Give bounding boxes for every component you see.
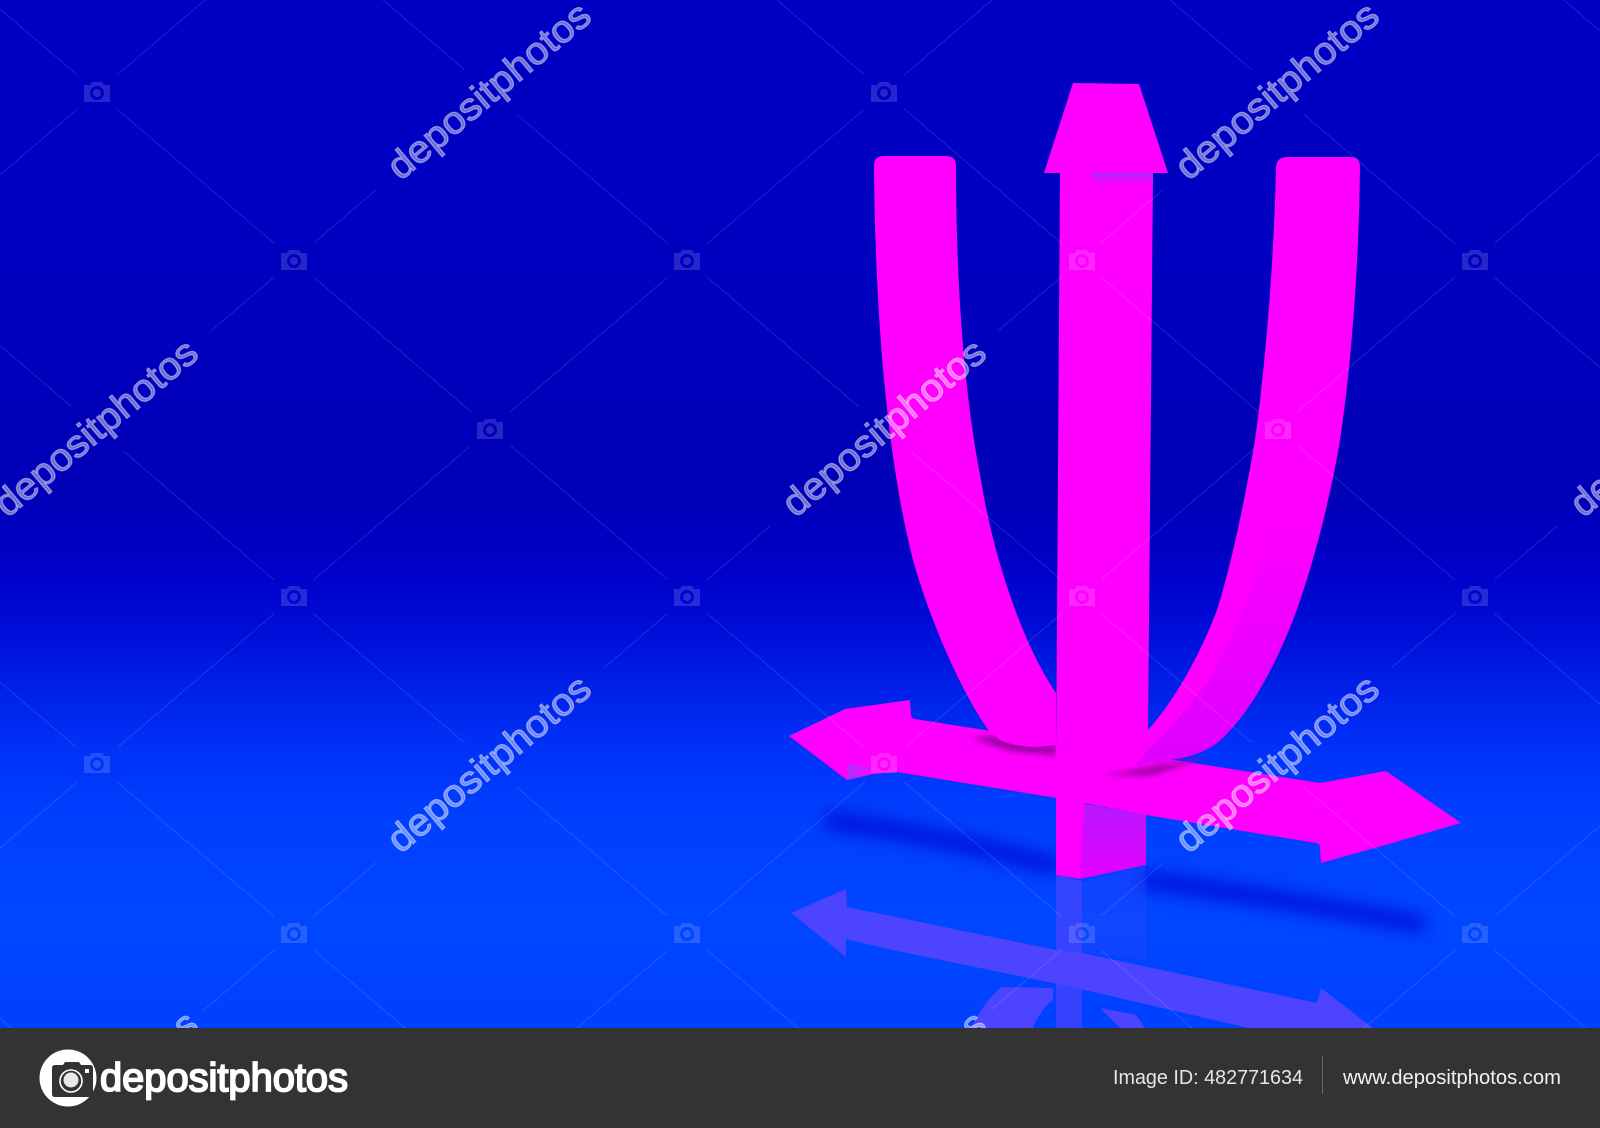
logo wordmark: depositphotos xyxy=(100,1056,348,1100)
post below the horizontal axis xyxy=(1056,790,1146,879)
watermark text: depositphotos xyxy=(1167,667,1387,861)
vertical axis arrow xyxy=(1044,83,1168,772)
horizontal axis double arrow xyxy=(789,700,1461,863)
watermark text: s xyxy=(165,1003,206,1048)
watermark text: depositphotos xyxy=(774,331,994,525)
parabola right arm side face xyxy=(1135,520,1322,765)
footer bar xyxy=(0,1028,1600,1128)
watermark text: s xyxy=(953,1003,994,1048)
website: www.depositphotos.com xyxy=(1342,1067,1561,1089)
image id: Image ID: 482771634 xyxy=(1113,1067,1303,1089)
watermark camera icons xyxy=(84,82,1488,943)
watermark text: depositphotos xyxy=(1167,0,1387,188)
parabola right arm xyxy=(1100,157,1360,770)
arrow head underside left xyxy=(847,764,880,780)
parabola curve xyxy=(874,156,1360,770)
arrow shaft and heads xyxy=(789,700,1461,863)
parabola left arm xyxy=(874,156,1056,747)
floor reflection of the axes xyxy=(791,865,1373,1028)
watermark text: depositphotos xyxy=(379,0,599,188)
watermark text: depositphotos xyxy=(379,667,599,861)
arrow head underside right xyxy=(1321,823,1461,863)
ground shadow xyxy=(830,821,1420,924)
icon: camera logo xyxy=(40,1050,96,1106)
shadow cast on the arrow xyxy=(970,735,1056,756)
